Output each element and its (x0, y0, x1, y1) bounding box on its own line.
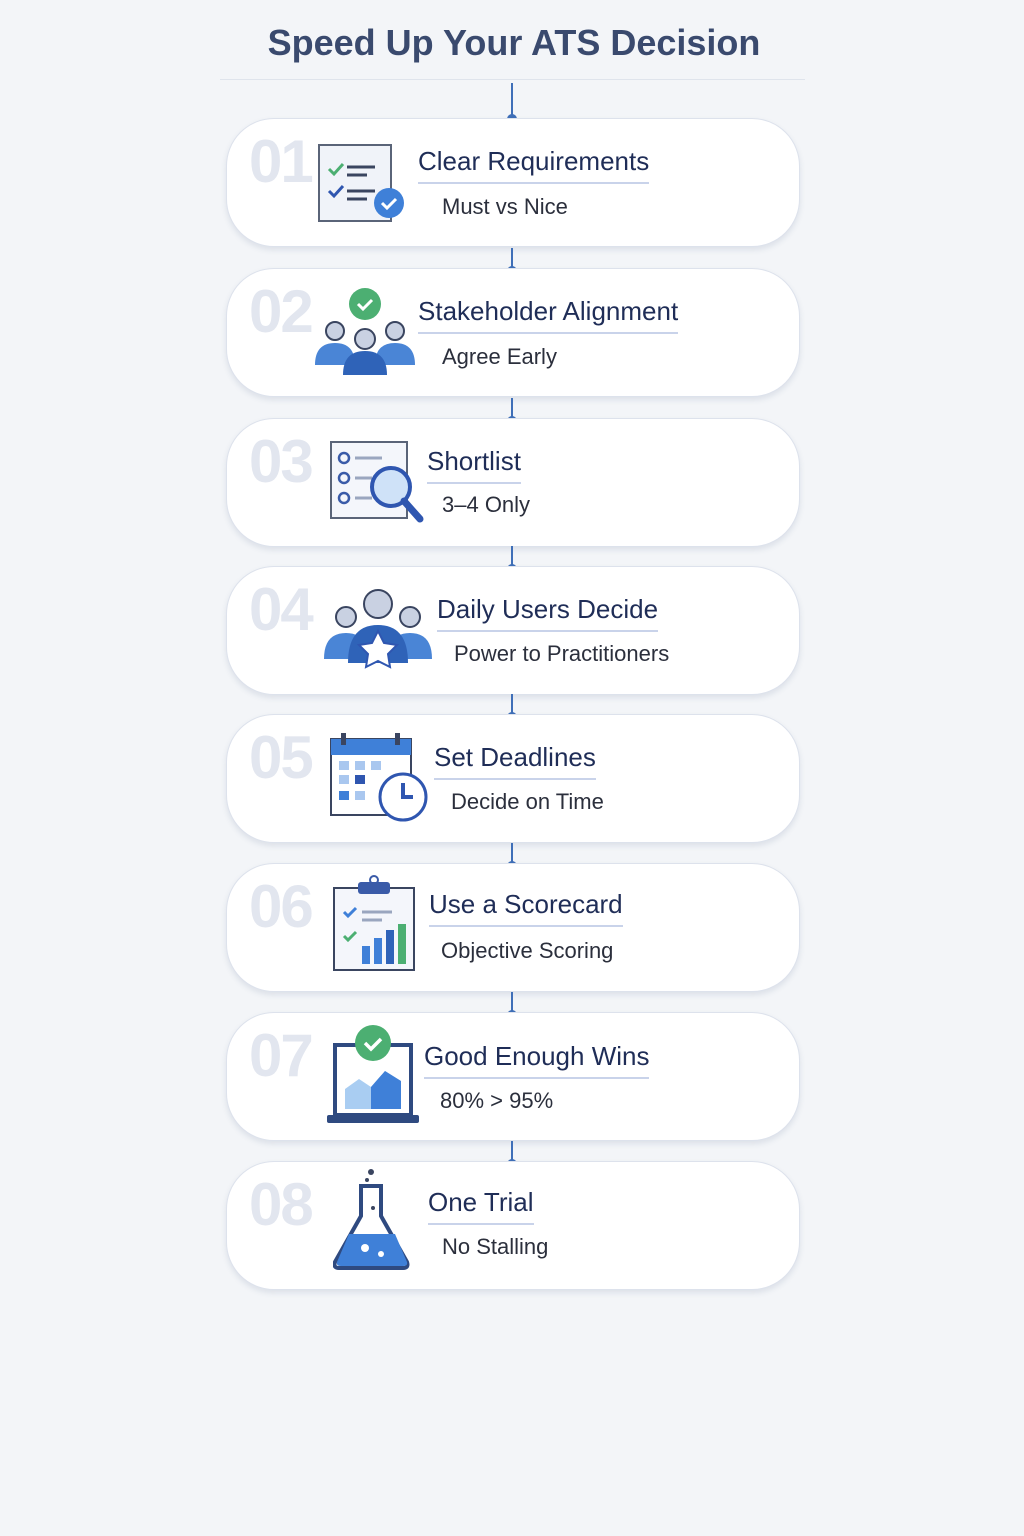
card 4: Daily Users Decide (437, 594, 658, 624)
card 2: Stakeholder Alignment (418, 296, 678, 326)
card 8: 08 (249, 1171, 312, 1238)
card 2: 02 (249, 278, 312, 345)
icon: users star (324, 589, 432, 669)
connector (511, 992, 513, 1012)
card 5: 05 (249, 724, 312, 791)
icon: team check (315, 288, 415, 375)
card 5: Set Deadlines (434, 742, 596, 772)
icon: calendar clock (330, 733, 428, 822)
icon: laptop chart check (327, 1025, 419, 1123)
icon: shortlist search (330, 441, 424, 522)
card 8: One Trial (428, 1187, 534, 1217)
card 3: 03 (249, 428, 312, 495)
card 6 (226, 863, 800, 992)
connector (511, 83, 513, 116)
card 6: Use a Scorecard (429, 889, 623, 919)
card 5: Decide on Time (451, 789, 604, 814)
card 1: Clear Requirements (418, 146, 649, 176)
connector (511, 398, 513, 418)
card 1: Must vs Nice (442, 194, 568, 219)
connector (511, 1141, 513, 1161)
card 6: Objective Scoring (441, 938, 613, 963)
card 5 (226, 714, 800, 843)
card 3: Shortlist (427, 446, 521, 476)
card 6: 06 (249, 873, 312, 940)
card 8: No Stalling (442, 1234, 548, 1259)
connector (511, 694, 513, 714)
icon: checklist (318, 144, 404, 222)
connector (511, 248, 513, 268)
connector (511, 843, 513, 863)
icon: scorecard (333, 875, 415, 971)
title: Speed Up Your ATS Decision (268, 22, 760, 63)
card 4: 04 (249, 576, 312, 643)
card 7: 80% > 95% (440, 1088, 553, 1113)
card 3: 3–4 Only (442, 492, 530, 517)
card 1 (226, 118, 800, 247)
card 4 (226, 566, 800, 695)
card 1: 01 (249, 128, 312, 195)
card 7: Good Enough Wins (424, 1041, 649, 1071)
card 4: Power to Practitioners (454, 641, 669, 666)
card 2: Agree Early (442, 344, 557, 369)
card 7 (226, 1012, 800, 1141)
connector (511, 546, 513, 566)
card 2 (226, 268, 800, 397)
card 3 (226, 418, 800, 547)
card 8 (226, 1161, 800, 1290)
card 7: 07 (249, 1022, 312, 1089)
icon: flask (333, 1169, 410, 1270)
